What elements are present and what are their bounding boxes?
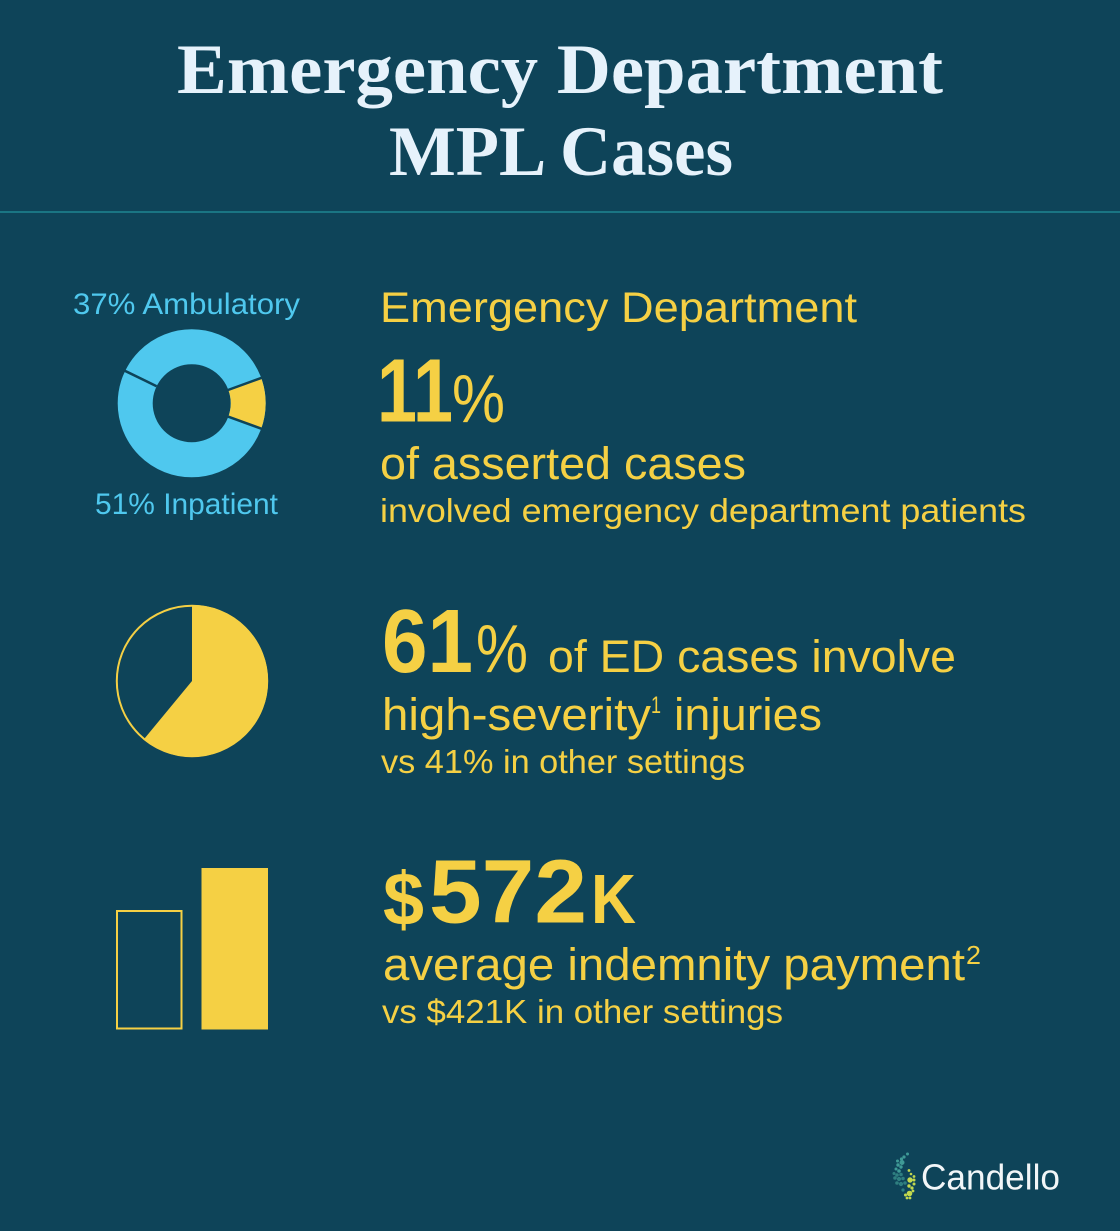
label: ambulatory: 37% Ambulatory [73,288,300,321]
stat: 11 percent: % [452,361,505,437]
panel: indemnity payment [117,842,981,1030]
label: inpatient: 51% Inpatient [95,488,279,521]
text: involved patients: involved emergency department patients [380,492,1026,529]
title: MPL Cases [389,113,733,191]
text: vs 421K: vs $421K in other settings [382,993,783,1030]
text: average indemnity payment: average indemnity payment [383,939,966,990]
stat: 572K: $ [383,857,424,941]
stat: 61 percent [382,592,528,692]
text: of ED cases involve: of ED cases involve [548,631,956,682]
donut chart [124,347,266,460]
title [177,31,943,191]
text: high-severity injuries [382,689,822,740]
stat: 11 percent: 11 [377,342,453,442]
bar chart [117,868,268,1030]
panel: emergency department share [73,284,1026,529]
heading: emergency department: Emergency Department [380,284,857,332]
text: average indemnity payment: 2 [966,940,981,970]
title: Emergency Department [177,31,943,109]
stat: 572K: 572 [429,842,587,942]
text: vs 41 percent: vs 41% in other settings [381,743,745,780]
icon: candle dots [893,1153,915,1199]
text: of asserted cases: of asserted cases [380,438,746,489]
text: high-severity injuries: high-severity [382,689,652,740]
wordmark: Candello [921,1156,1060,1198]
stat: 572K [383,842,636,942]
stat: 572K: K [591,860,636,938]
pie chart [117,605,268,757]
text: high-severity injuries: injuries [674,689,822,740]
logo: Candello [893,1153,1060,1199]
panel: high severity injuries [117,592,956,780]
text: high-severity injuries: 1 [651,692,661,719]
stat: 61 percent: 61 [382,592,473,692]
stat: 61 percent: % [476,611,528,687]
